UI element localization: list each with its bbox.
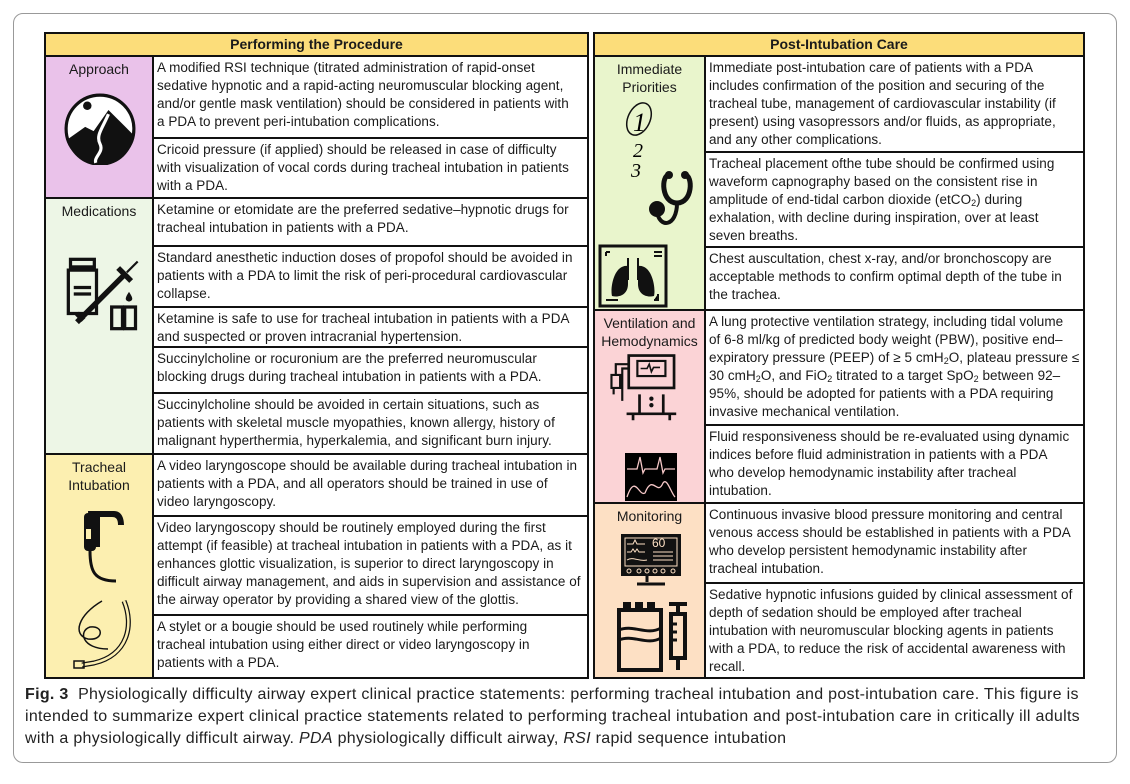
text: immediate priorities 1 (706, 57, 1083, 153)
icon: 1 2 3 list (626, 102, 652, 181)
label: immediate priorities (595, 57, 706, 311)
label: monitoring (595, 504, 706, 677)
text: approach 1 (154, 57, 587, 139)
icon: mountain (64, 94, 136, 165)
icon: medications (66, 258, 138, 330)
text: medications 4: Succinylcholine or rocuronium are the preferred neuromuscular (157, 351, 537, 366)
text: immediate priorities 2: Tracheal placement ofthe tube should be confirmed using (709, 156, 1054, 171)
text: tracheal intubation 2: the airway operator by providing a shared view of the glottis. (157, 592, 519, 607)
text: approach 2 (154, 139, 587, 199)
text: monitoring 2 (709, 587, 1072, 674)
text: tracheal intubation 1: patients with a PDA, and all operators should be trained in use of (157, 476, 548, 491)
text: medications 4: blocking drugs during tracheal intubation in patients with a PDA. (157, 369, 542, 384)
text: medications 2: Standard anesthetic induction doses of propofol should be avoided in (157, 250, 573, 265)
text: approach 2: with a PDA. (157, 178, 228, 193)
caption: Fig. 3 Physiologically difficulty airway expert clinical practice statements: performing tracheal intubation and post-intubation care. This figure is (25, 686, 1079, 703)
label: approach (46, 57, 154, 199)
text: monitoring 1: venous access should be established in patients with a PDA (709, 525, 1071, 540)
label: medications (46, 199, 154, 455)
text: ventilation 1 (706, 311, 1083, 426)
text: tracheal intubation 2: enhances glottic visualization, is superior to direct laryngoscopy in (157, 556, 554, 571)
text: tracheal intubation 1: A video laryngoscope should be available during tracheal intubation in (157, 458, 577, 473)
text: immediate priorities 2 (706, 153, 1083, 248)
text: immediate priorities 2: seven breaths. (709, 228, 798, 243)
text: approach 1: sedative hypnotic and a rapid-acting neuromuscular blocking agent, (157, 78, 563, 93)
text: immediate priorities 3: the trachea. (709, 287, 781, 302)
text: tracheal intubation 2: Video laryngoscopy should be routinely employed during the first (157, 520, 546, 535)
text: monitoring 2: Sedative hypnotic infusions guided by clinical assessment of (709, 587, 1072, 602)
text: ventilation 2: indices before fluid administration in patients with a PDA (709, 447, 1048, 462)
icon: infusion bag and syringe (617, 602, 687, 672)
heading: performing the procedure: Performing the Procedure (230, 36, 403, 52)
text: tracheal intubation 2: attempt (if feasible) at tracheal intubation in patients with a PDA, as it (157, 538, 572, 553)
icon: video laryngoscope (84, 511, 124, 582)
label: approach: Approach (69, 61, 129, 77)
text: medications 5: malignant hyperthermia, hyperkalemia, and significant burn injury. (157, 433, 552, 448)
text: approach 1: a PDA to prevent peri-intubation complications. (157, 114, 440, 129)
heading: post-intubation care (595, 34, 1083, 57)
text: medications 3: Ketamine is safe to use for tracheal intubation in patients with a PDA (157, 311, 570, 326)
text: medications 1: tracheal intubation in patients with a PDA. (157, 220, 409, 235)
text: monitoring 1: Continuous invasive blood pressure monitoring and central (709, 507, 1062, 522)
text: immediate priorities 3: Chest auscultation, chest x-ray, and/or bronchoscopy are (709, 251, 1052, 266)
text: ventilation 1: 30 cmH2O, and FiO2 titrated to a target SpO2 between 92– (709, 368, 1060, 384)
icon: 1 2 3 list: 1 (633, 108, 646, 137)
text: ventilation 1: expiratory pressure (PEEP) of ≥ 5 cmH2O, plateau pressure ≤ (709, 350, 1079, 366)
text: immediate priorities 1: and any other complications. (709, 132, 882, 147)
label: ventilation and hemodynamics: Hemodynamics (601, 333, 698, 349)
text: immediate priorities 1: Immediate post-intubation care of patients with a PDA (709, 60, 1033, 75)
icon: patient monitor: 60 (652, 536, 666, 550)
label: monitoring: Monitoring (617, 508, 682, 524)
text: medications 1: Ketamine or etomidate are the preferred sedative–hypnotic drugs for (157, 202, 569, 217)
label: immediate priorities: Immediate (617, 61, 682, 77)
text: medications 3: and suspected or proven intracranial hypertension. (157, 329, 462, 344)
text: ventilation 2 (706, 426, 1083, 504)
heading: post-intubation care: Post-Intubation Care (770, 36, 908, 52)
text: tracheal intubation 2 (154, 517, 587, 616)
text: medications 5: patients with skeletal muscle myopathies, known allergy, history of (157, 415, 555, 430)
icon: 1 2 3 list: 2 (633, 140, 643, 162)
panel: post-intubation care (593, 32, 1085, 679)
text: medications 3 (154, 308, 587, 348)
text: medications 5 (154, 394, 587, 455)
label: immediate priorities: Priorities (622, 79, 677, 95)
label: ventilation and hemodynamics: Ventilation and (604, 315, 695, 331)
text: medications 5: Succinylcholine should be avoided in certain situations, such as (157, 397, 539, 412)
text: medications 4 (154, 348, 587, 394)
heading: performing the procedure (46, 34, 587, 57)
text: monitoring 1: who develop persistent hemodynamic instability after (709, 543, 1027, 558)
text: approach 2: Cricoid pressure (if applied) should be released in case of difficulty (157, 142, 557, 157)
text: tracheal intubation 1: video laryngoscopy. (157, 494, 276, 509)
caption: with a physiologically difficult airway. PDA physiologically difficult airway, RSI rapid sequence intubation (25, 730, 786, 747)
icon: stethoscope (649, 171, 693, 225)
label: medications: Medications (62, 203, 136, 219)
text: ventilation 2: Fluid responsiveness should be re-evaluated using dynamic (709, 429, 1069, 444)
text: medications 2: collapse. (157, 286, 211, 301)
text: ventilation 1: of 6-8 ml/kg of predicted body weight (PBW), positive end– (709, 332, 1062, 347)
text: medications 1 (154, 199, 587, 247)
label: tracheal intubation: Tracheal (72, 459, 126, 475)
text: immediate priorities 2: amplitude of end-tidal carbon dioxide (etCO2) during (709, 192, 1022, 208)
text: approach 2: with visualization of vocal cords during tracheal intubation in patients (157, 160, 569, 175)
text: monitoring 2: depth of sedation should be employed after tracheal (709, 605, 1022, 620)
text: tracheal intubation 2: difficult airway management, and aids in supervision and assistance of (157, 574, 581, 589)
text: monitoring 1: tracheal intubation. (709, 561, 824, 576)
text: immediate priorities 1: present) using vasopressors and/or fluids, as appropriate, (709, 114, 1056, 129)
text: immediate priorities 3: acceptable methods to confirm optimal depth of the tube in (709, 269, 1062, 284)
text: tracheal intubation 3: A stylet or a bougie should be used routinely while performing (157, 619, 527, 634)
label: ventilation and hemodynamics (595, 311, 706, 504)
icon: bougie (73, 600, 131, 669)
text: immediate priorities 1: includes confirmation of the position and securing of the (709, 78, 1044, 93)
text: medications 2 (154, 247, 587, 308)
icon: chest x-ray (598, 244, 668, 308)
text: tracheal intubation 3: patients with a PDA. (157, 655, 279, 670)
text: ventilation 1: A lung protective ventilation strategy, including tidal volume (709, 314, 1063, 329)
text: immediate priorities 2: waveform capnography based on the consistent rise in (709, 174, 1038, 189)
text: monitoring 2: intubation with neuromuscular blocking agents in patients (709, 623, 1054, 638)
text: immediate priorities 3 (706, 248, 1083, 311)
text: tracheal intubation 3: tracheal intubation using either direct or video laryngoscopy in (157, 637, 530, 652)
text: immediate priorities 2: exhalation, with decline during inspiration, over at least (709, 210, 1039, 225)
text: monitoring 2: with a PDA, to reduce the risk of accidental awareness with (709, 641, 1066, 656)
text: medications 2: patients with a PDA to limit the risk of peri-procedural cardiovascular (157, 268, 567, 283)
text: ventilation 2: intubation. (709, 483, 772, 498)
text: approach 1: A modified RSI technique (titrated administration of rapid-onset (157, 60, 535, 75)
text: ventilation 1: 95%, should be adopted for patients with a PDA requiring (709, 386, 1053, 401)
text: ventilation 1: invasive mechanical ventilation. (709, 404, 899, 419)
text: monitoring 2: recall. (709, 659, 745, 674)
text: ventilation 2: who develop hemodynamic instability after tracheal (709, 465, 1016, 480)
label: tracheal intubation: Intubation (68, 477, 130, 493)
text: approach 1: and/or gentle mask ventilation) should be considered in patients with (157, 96, 569, 111)
text: immediate priorities 1: tracheal tube, management of cardiovascular instability (if (709, 96, 1056, 111)
icon: ventilator (610, 354, 676, 420)
icon: waveform monitor (625, 453, 677, 501)
text: tracheal intubation 1 (154, 455, 587, 517)
label: tracheal intubation (46, 455, 154, 677)
panel: performing the procedure (44, 32, 589, 679)
icon: patient monitor (621, 534, 681, 586)
text: tracheal intubation 3 (157, 619, 530, 670)
caption (25, 686, 1080, 747)
caption: intended to summarize expert clinical practice statements related to performing tracheal intubation and post-intubation care in critically ill adults (25, 708, 1080, 725)
text: monitoring 1 (706, 504, 1083, 584)
